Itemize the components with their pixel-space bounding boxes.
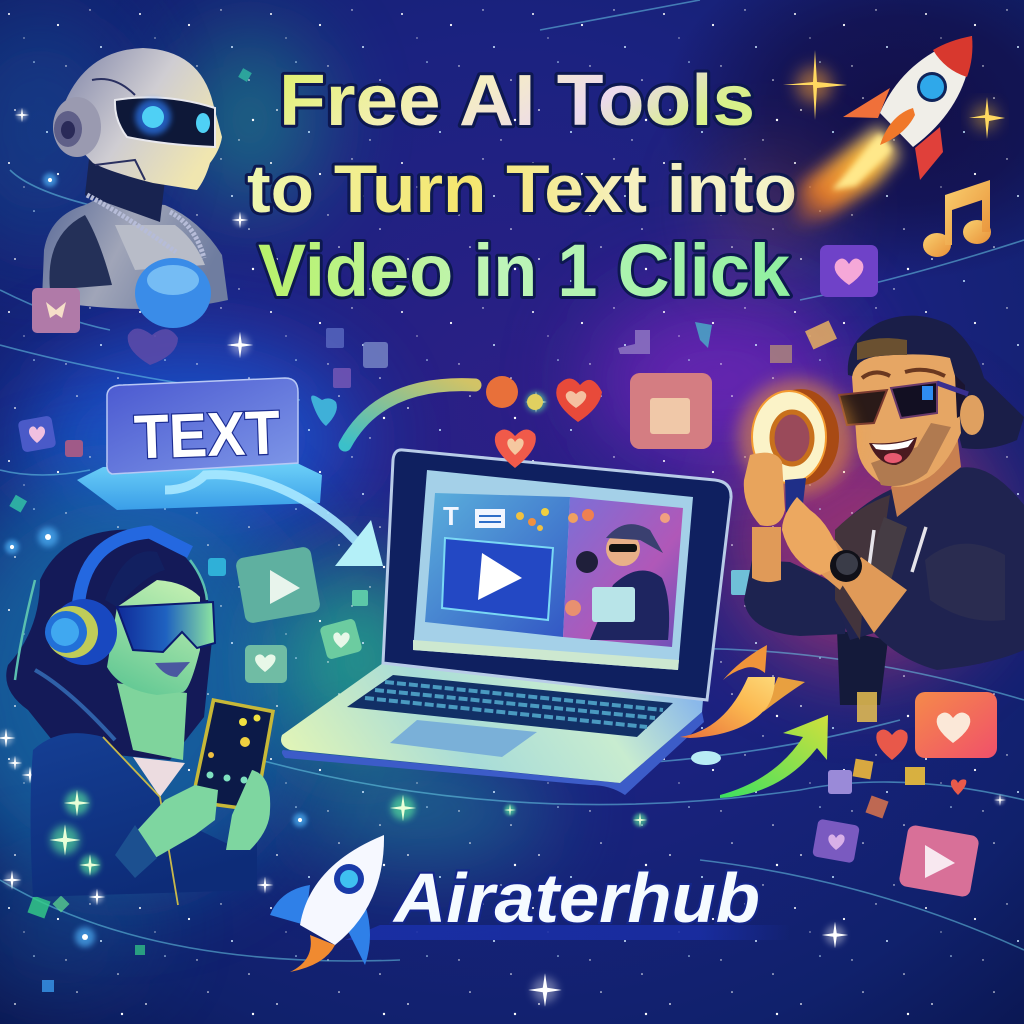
laptop screen frame (383, 450, 731, 700)
heart tile purple (812, 819, 860, 863)
orange swoosh arrow (680, 645, 805, 738)
man smile (869, 437, 917, 465)
icons: play and heart tiles left (208, 546, 368, 683)
icon: music note (923, 180, 991, 257)
phone in hand (190, 698, 275, 812)
man with ring light (738, 316, 1024, 705)
logo: Airaterhub (392, 859, 760, 937)
ring light (738, 379, 854, 512)
laptop trackpad (390, 720, 537, 757)
title (247, 61, 797, 312)
arc sparkle trail (345, 376, 543, 445)
title: Free AI Tools (279, 61, 755, 141)
woman headset (45, 532, 190, 665)
arms (752, 527, 907, 633)
laptop base (281, 663, 704, 795)
laptop screen left pane (425, 493, 570, 637)
heart above laptop (495, 429, 536, 468)
laptop screen left pane: T (443, 501, 459, 531)
logo (270, 835, 790, 972)
woman hands (115, 770, 270, 878)
sparkle top right (783, 50, 1005, 139)
icons: floating hearts and folder (311, 373, 712, 449)
woman VR visor (117, 602, 215, 652)
heart tile large (915, 692, 997, 758)
text tile: TEXT (133, 398, 281, 473)
rocket top right (795, 36, 972, 228)
icon: small tiles left (17, 288, 837, 595)
smart watch (830, 550, 862, 582)
icons: right side floating tiles (680, 645, 997, 898)
woman smile (155, 662, 190, 677)
icon: heart tile (820, 245, 878, 297)
man sunglasses (839, 382, 968, 425)
robot visor (115, 97, 215, 147)
title: to Turn Text into (247, 151, 797, 227)
laptop keyboard (347, 675, 673, 737)
woman neck and shirt (117, 683, 187, 760)
robot helmet (63, 48, 222, 190)
woman face (107, 580, 200, 695)
play tile (898, 824, 980, 898)
robot torso (42, 200, 228, 309)
title: Video in 1 Click (258, 229, 791, 312)
arrow: text to laptop (165, 475, 383, 566)
woman with headset (6, 530, 275, 905)
small heart (876, 729, 908, 760)
green arrow (720, 715, 828, 798)
laptop (281, 450, 731, 795)
sparkles over woman (49, 790, 105, 905)
man head (848, 316, 1024, 517)
logo rocket (270, 835, 384, 972)
right hand (782, 497, 843, 575)
left hand (744, 453, 785, 526)
man hoodie (744, 467, 1024, 705)
laptop screen right pane: man (563, 497, 683, 647)
woman jacket (30, 733, 257, 897)
robot character (42, 48, 228, 328)
woman hair (6, 530, 212, 760)
text tile (77, 378, 322, 510)
